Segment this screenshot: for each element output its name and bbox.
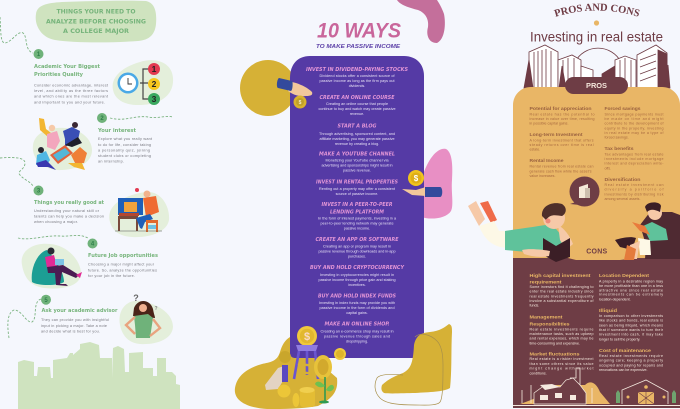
title: investing in real estate: Investing in real estate: [530, 28, 663, 44]
way 10: Creating an e-commerce shop may result in: [320, 330, 394, 334]
pros left column: value increases.: [530, 174, 555, 178]
step 1 text: Consider economic advantage, interest: [34, 83, 109, 87]
way 5: source of passive income.: [336, 192, 378, 196]
step 5 text: and decide what is best for you.: [41, 330, 100, 334]
way 8: Investing in cryptocurrencies might result in: [320, 273, 394, 277]
cons right column: Cost of maintenance: [599, 348, 652, 353]
pros right column: interest and depreciation write-: [604, 162, 664, 166]
step 4 text: for your job in the future.: [88, 274, 135, 278]
step 2 text: 2: [100, 116, 104, 122]
step 3 text: Understanding your natural skill or: [34, 209, 100, 213]
icon: speech bubble with building: [570, 176, 600, 206]
way 6: passive income.: [344, 226, 370, 230]
pink blob right: [415, 149, 452, 219]
purple content panel: [290, 56, 424, 358]
way 3: affiliate marketing, you may generate passive: [320, 137, 394, 141]
pros left column: generate cash flow while the asset's: [530, 169, 592, 173]
illustration: person working at a desk: [109, 188, 169, 237]
pros left column: Rental revenue from real estate can: [530, 165, 594, 169]
way 1: dividends.: [349, 84, 365, 88]
pros right column: forced savings.: [604, 136, 629, 140]
step 4 text: [88, 238, 158, 278]
icon: clock with numbered options: [113, 60, 173, 105]
step 1 text: level, and ability as the three factors: [34, 89, 108, 93]
cons left column: Market fluctuations: [530, 351, 580, 356]
way 10: [320, 321, 394, 344]
step 3 text: 3: [37, 189, 41, 195]
pros right column: Forced savings: [604, 106, 641, 111]
pros right column: be made on time and might: [604, 117, 664, 121]
step 1 text: Priorities Quality: [34, 72, 84, 78]
way 8: incentives.: [348, 283, 366, 287]
pros right column: among several assets.: [604, 197, 640, 201]
icon: clock with numbered options: 3: [152, 94, 157, 104]
way 4: Monetizing your YouTube channel via: [326, 158, 389, 162]
icon: hand dropping coin: [277, 78, 312, 108]
way 7: [316, 237, 399, 258]
way 3: revenue by creating a blog.: [335, 142, 379, 146]
way 5: INVEST IN RENTAL PROPERTIES: [316, 180, 398, 186]
title banner: [36, 1, 156, 42]
pros left column: Rental Income: [530, 158, 564, 163]
cons left column: High capital investment: [530, 273, 591, 278]
pros left column: Real estate has the potential to: [530, 112, 594, 116]
icon: clock with numbered options: 1: [152, 64, 157, 74]
cons right column: be more profitable than one in a less: [599, 284, 663, 288]
step 5 text: [41, 295, 118, 334]
yellow blob bottom right: [381, 324, 452, 393]
cons right column: investments can be extremely: [599, 293, 663, 297]
cons right column: that if someone wants to turn their: [599, 328, 664, 332]
way 4: MAKE A YOUTUBE CHANNEL: [319, 152, 395, 158]
way 1: [306, 67, 408, 88]
step 3 text: when choosing a major.: [34, 220, 78, 224]
step 1 text: and important to you and your future.: [34, 100, 105, 104]
step 2 text: Explore what you really want: [98, 137, 153, 141]
way 6: [318, 202, 397, 230]
cons right column: longer to sell the property.: [599, 337, 640, 341]
cons left column: [530, 273, 594, 375]
cons left column: maintenance tasks, such as upkeep: [530, 332, 594, 336]
illustration: person reading in armchair: [615, 202, 680, 260]
pros right column: [604, 106, 664, 201]
pros left column: Potential for appreciation: [530, 106, 592, 111]
step 2 text: a personality quiz, joining: [98, 149, 150, 153]
orange pros panel: [513, 87, 680, 262]
pros right column: Real estate investment can: [604, 183, 664, 187]
cons left column: funds.: [530, 304, 539, 308]
heading: pros and cons: PROS AND CONS: [554, 4, 640, 17]
title banner: A COLLEGE MAJOR: [63, 28, 129, 35]
way 7: CREATE AN APP OR SOFTWARE: [316, 237, 399, 243]
city illustration: [524, 45, 670, 88]
pros left column: Long-term Investment: [530, 132, 583, 137]
cons badge: [568, 242, 628, 260]
way 9: capital gains.: [346, 311, 368, 315]
cons right column: investment into cash, it may take: [599, 333, 663, 337]
cons left column: Management: [530, 315, 563, 320]
pros right column: offs.: [604, 166, 611, 170]
way 7: passive revenue through downloads and in-app: [318, 250, 396, 254]
illustration: woman with question marks: ?: [154, 306, 158, 312]
cons right column: renovations can be expensive.: [599, 368, 648, 372]
cons right column: In comparison to other investments: [599, 314, 663, 318]
way 9: [318, 293, 396, 315]
way 8: passive income through price gain and staking: [318, 278, 396, 282]
pros left column: increase in value over time, resulting: [530, 117, 594, 121]
pros left column: estate.: [530, 148, 540, 152]
pros right column: investments by distributing risk: [604, 192, 664, 196]
cons right column: ongoing care; keeping a property: [599, 359, 663, 363]
step 2 text: [97, 113, 153, 164]
panel: pros and cons of investing in real estate: [468, 4, 680, 408]
way 9: BUY AND HOLD INDEX FUNDS: [318, 293, 396, 299]
yellow circle decoration: [240, 60, 296, 116]
pros right column: in real estate may be a type of: [604, 131, 664, 135]
cons left column: Real estate is a riskier investment: [530, 357, 594, 361]
way 6: In the form of interest payments, investing in a: [318, 216, 397, 220]
cons left column: enter the real estate industry since: [530, 290, 594, 294]
way 4: [319, 152, 395, 172]
illustration: houses: [513, 368, 680, 406]
pros right column: Since mortgage payments must: [604, 112, 664, 116]
step 1 text: [34, 49, 109, 104]
illustration: coins, stool and plant: [265, 326, 346, 407]
way 4: passive revenue.: [343, 168, 371, 172]
way 6: LENDING PLATFORM: [330, 210, 384, 216]
cons left column: might change with market: [530, 367, 594, 371]
illustration: woman with question marks: ?: [133, 293, 139, 303]
pros left column: A long-term investment that offers: [530, 138, 594, 142]
cons left column: requirement: [530, 279, 562, 284]
pros right column: contribute to the development of: [604, 122, 664, 126]
cons left column: Responsibilities: [530, 321, 570, 326]
title: 10 ways: 10 WAYS: [317, 20, 401, 42]
pros right column: Tax benefits: [604, 146, 634, 151]
pros right column: Tax advantages from real estate: [604, 152, 664, 156]
illustration: woman on bean bag with laptop: [22, 244, 82, 289]
step 1 text: Academic Your Biggest: [34, 64, 101, 70]
panel: choosing a college major: [0, 1, 180, 409]
way 9: Investing in index funds may provide you with: [319, 301, 395, 305]
step 4 text: 4: [91, 242, 95, 248]
step 3 text: talents can help you make a decision: [34, 214, 104, 218]
step 5 text: 5: [44, 298, 48, 304]
cons left column: real estate investments frequently: [530, 294, 594, 298]
panel: 10 ways to make passive income: [235, 0, 452, 409]
cons left column: time-consuming and expensive.: [530, 341, 580, 345]
way 2: CREATE AN ONLINE COURSE: [320, 95, 395, 101]
way 8: BUY AND HOLD CRYPTOCURRENCY: [310, 265, 405, 271]
subtitle: TO MAKE PASSIVE INCOME: [316, 44, 400, 50]
icon: hand with coin: [402, 170, 442, 197]
thin outline blob: [375, 334, 443, 405]
way 3: START A BLOG: [338, 123, 376, 129]
cons left column: and rental expenses, which may be: [530, 337, 594, 341]
cons right column: A property in a desirable region may: [599, 279, 663, 283]
pink blob top: [397, 0, 445, 43]
pros badge: PROS: [586, 83, 607, 90]
way 5: Renting out a property may offer a consistent: [319, 187, 395, 191]
way 10: dropshipping.: [346, 340, 368, 344]
illustration: coins, stool and plant: $: [304, 331, 310, 343]
pros right column: diversify a portfolio of: [604, 188, 664, 192]
cons left column: Real estate investments require: [530, 327, 594, 331]
way 3: [319, 123, 395, 146]
pros right column: investments include mortgage: [604, 157, 664, 161]
way 4: advertising and sponsorships might result in: [322, 164, 392, 168]
cons left column: than some others since its value: [530, 362, 594, 366]
step 2 text: to do for life, consider taking: [98, 143, 151, 147]
step 4 text: Future Job opportunities: [88, 253, 158, 259]
cons right column: attractive one since real estate: [599, 289, 663, 293]
step 5 text: input in picking a major. Take a note: [41, 324, 107, 328]
illustration: people playing a board game: [33, 118, 92, 170]
illustration: woman with question marks: [119, 293, 173, 344]
cons badge: CONS: [586, 248, 608, 256]
title banner: ANALYZE BEFORE CHOOSING: [46, 18, 146, 25]
step 5 text: They can provide you with insightful: [41, 318, 109, 322]
step 2 text: Your interest: [97, 128, 137, 134]
way 3: Through advertising, sponsored content, and: [319, 132, 395, 136]
way 1: Dividend stocks offer a consistent source of: [320, 74, 395, 78]
illustration: person lying and reading: [468, 201, 573, 262]
cons left column: Some investors find it challenging to: [530, 285, 594, 289]
cons right column: [599, 273, 664, 372]
way 7: purchases.: [348, 254, 366, 258]
step 4 text: Choosing a major might affect your: [88, 263, 155, 267]
step 3 text: Things you really good at: [34, 200, 105, 206]
cons right column: Real estate investments require: [599, 354, 663, 358]
step 4 text: future. So, analyze the opportunities: [88, 268, 157, 272]
icon: hand with coin: $: [414, 174, 419, 183]
way 2: continue to buy and watch may create passive: [318, 107, 396, 111]
pros badge: [565, 77, 628, 94]
cons right column: seen as being illiquid, which means: [599, 323, 663, 327]
way 10: passive revenue through sales and: [324, 334, 390, 338]
way 7: Creating an app or program may result in: [323, 244, 391, 248]
cons left column: conditions.: [530, 371, 547, 375]
cons right column: Illiquid: [599, 308, 617, 313]
step 1 text: and which ones are the most relevant: [34, 95, 109, 99]
cons right column: like stocks and bonds, real estate is: [599, 319, 663, 323]
way 6: INVEST IN A PEER-TO-PEER: [322, 202, 393, 208]
title banner: THINGS YOUR NEED TO: [56, 8, 136, 16]
yellow blob bottom left: [235, 337, 337, 409]
way 1: INVEST IN DIVIDEND-PAYING STOCKS: [306, 67, 408, 73]
pros right column: Diversification: [604, 177, 641, 182]
way 5: [316, 180, 398, 196]
way 10: MAKE AN ONLINE SHOP.: [324, 321, 390, 327]
maroon cons panel: [513, 258, 680, 408]
step 2 text: an internship.: [98, 160, 124, 164]
cons left column: involve a substantial expenditure of: [530, 299, 594, 303]
way 2: Creating an online course that people: [326, 102, 388, 106]
city skyline: [18, 342, 180, 409]
way 2: [318, 95, 396, 116]
step 2 text: student clubs or completing: [98, 154, 151, 158]
way 6: peer-to-peer lending network may generate: [320, 222, 394, 226]
pros right column: equity in the property, investing: [604, 126, 664, 130]
step 5 text: Ask your academic advisor: [42, 308, 118, 314]
cons right column: location-dependent.: [599, 297, 631, 301]
pros left column: steady returns over time is real: [530, 143, 594, 147]
way 8: [310, 265, 405, 287]
step 1 text: 1: [37, 52, 41, 58]
icon: hand dropping coin: $: [299, 100, 302, 106]
cons right column: occupied and paying for repairs and: [599, 363, 663, 367]
step 3 text: [34, 186, 105, 224]
icon: clock with numbered options: 2: [152, 79, 157, 89]
way 9: passive income in the form of dividends and: [320, 306, 394, 310]
pros left column: in possible capital gains.: [530, 122, 568, 126]
cons right column: Location Dependent: [599, 273, 650, 278]
pros left column: [530, 106, 594, 178]
heading: pros and cons: [554, 4, 640, 26]
way 2: revenue.: [350, 112, 364, 116]
way 1: passive income as long as the firm pays out: [320, 79, 394, 83]
